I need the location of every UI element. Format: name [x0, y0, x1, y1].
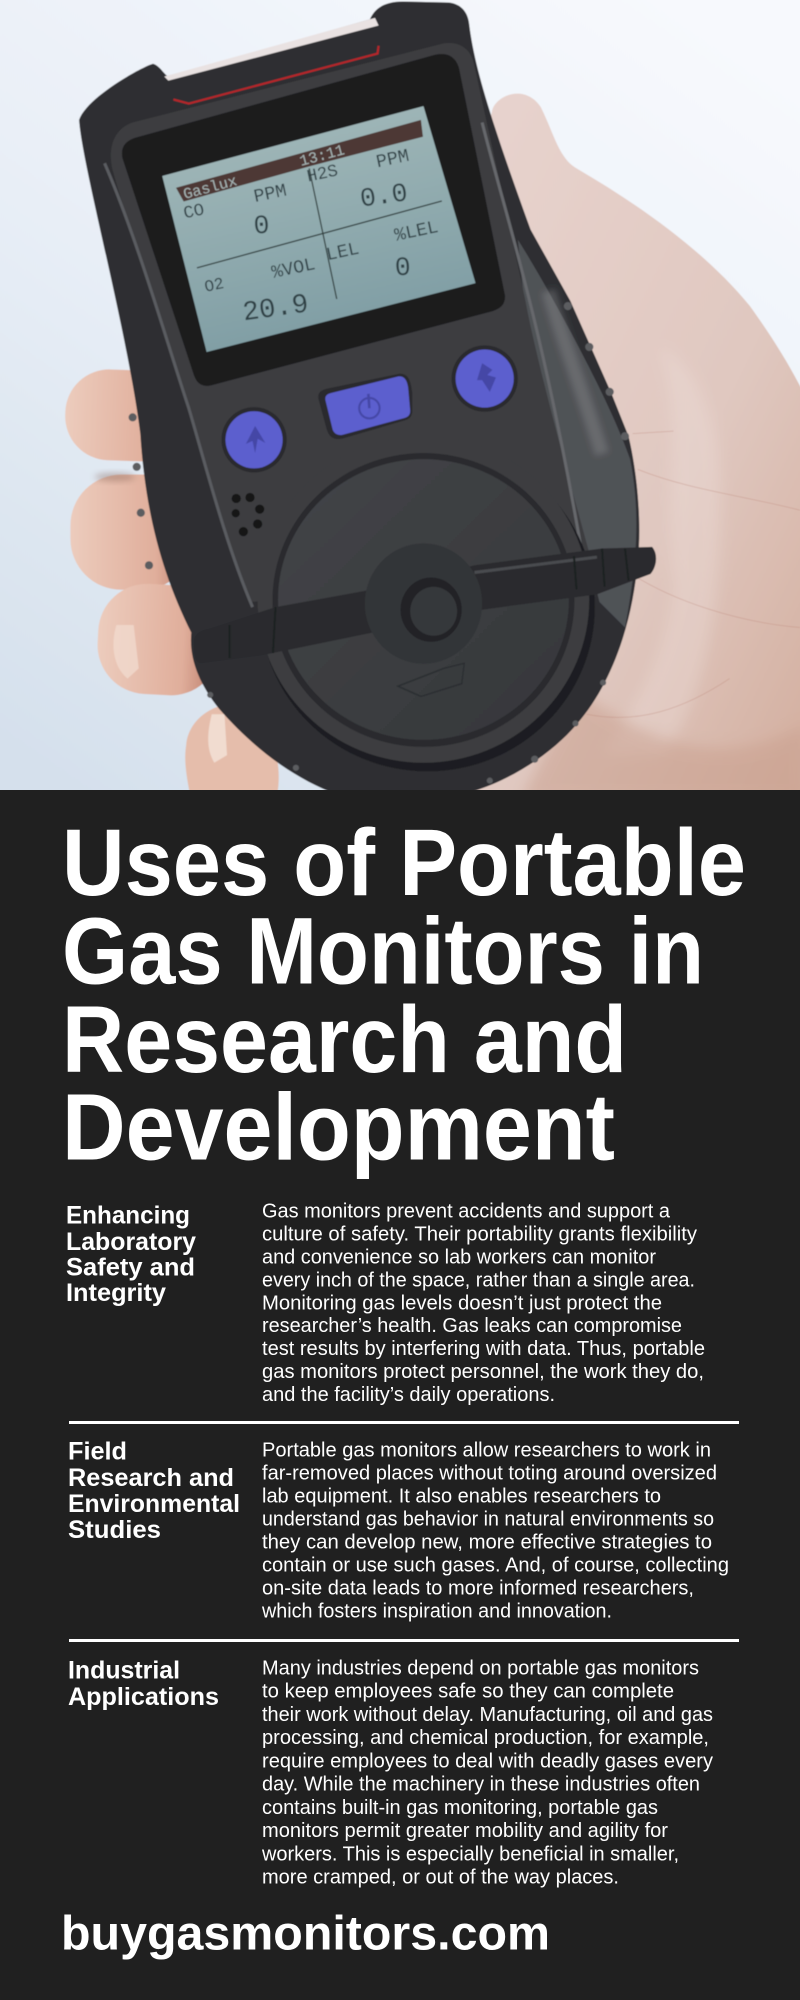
body text: laboratory safety: culture of safety. Their portability grants flexibility	[262, 1223, 697, 1245]
body text: industrial applications: more cramped, or out of the way places.	[262, 1867, 619, 1889]
body text: laboratory safety: researcher’s health. Gas leaks can compromise	[262, 1315, 682, 1337]
LCD readouts: 0	[253, 211, 271, 242]
heading: Industrial Applications: Applications	[68, 1683, 219, 1711]
photo: hand holding portable gas monitor	[0, 0, 800, 801]
body text: industrial applications: their work without delay. Manufacturing, oil and gas	[262, 1704, 713, 1726]
LCD readouts: Gaslux	[181, 172, 239, 204]
body text: field research: far-removed places without toting around oversized	[262, 1463, 717, 1485]
button: power	[318, 374, 412, 439]
LCD readouts: 0.0	[358, 178, 410, 215]
body text: laboratory safety: and convenience so lab workers can monitor	[262, 1246, 656, 1268]
body text: field research	[261, 1440, 729, 1623]
button: up arrow	[221, 407, 287, 472]
title	[62, 810, 746, 1181]
body text: industrial applications: require employees to deal with deadly gases every	[262, 1750, 713, 1772]
heading: Enhancing Laboratory Safety and Integrity	[66, 1202, 196, 1307]
body text: laboratory safety	[262, 1200, 705, 1406]
LCD readouts: 0	[394, 252, 412, 283]
body text: field research: they can develop new, more effective strategies to	[262, 1532, 712, 1554]
body text: laboratory safety: every inch of the space, rather than a single area.	[262, 1269, 695, 1291]
title: Uses of Portable	[62, 810, 746, 916]
body text: industrial applications: day. While the machinery in these industries often	[262, 1774, 700, 1796]
heading: Industrial Applications	[68, 1657, 219, 1711]
footer: website URL: buygasmonitors.com	[61, 1908, 550, 1961]
LCD readouts: 13:11	[298, 141, 347, 171]
monitor body	[79, 2, 639, 801]
title: Research and	[62, 987, 627, 1093]
LCD readouts	[181, 141, 440, 329]
body text: field research: on-site data leads to more informed researchers,	[262, 1578, 694, 1600]
LCD screen	[162, 106, 476, 352]
heading: Field Research and Environmental Studies: Environmental	[68, 1490, 240, 1518]
LCD readouts: PPM	[374, 146, 411, 173]
body text: field research: contain or use such gases. And, of course, collecting	[262, 1555, 729, 1577]
body text: industrial applications: workers. This is especially beneficial in smaller,	[261, 1843, 679, 1865]
section: Enhancing Laboratory Safety and Integrity	[66, 1200, 705, 1406]
body text: industrial applications: Many industries depend on portable gas monitors	[262, 1657, 699, 1679]
LCD readouts: O2	[203, 274, 226, 297]
section: Industrial Applications	[68, 1657, 713, 1889]
body text: industrial applications: monitors permit greater mobility and agility for	[262, 1820, 668, 1842]
hand: fingers	[64, 368, 279, 801]
heading: Enhancing Laboratory Safety and Integrity: Enhancing	[66, 1202, 190, 1230]
LCD readouts: %VOL	[270, 254, 317, 284]
heading: Field Research and Environmental Studies: Research and	[68, 1464, 234, 1492]
photo backdrop	[0, 0, 800, 801]
sensor disc	[258, 436, 595, 771]
title: Development	[62, 1075, 615, 1181]
speaker holes	[232, 493, 264, 536]
heading: Field Research and Environmental Studies	[68, 1438, 240, 1544]
heading: Field Research and Environmental Studies: Studies	[68, 1516, 161, 1544]
heading: Industrial Applications: Industrial	[68, 1657, 180, 1685]
top sensor slot and red stripe	[164, 18, 379, 104]
LCD header bar	[176, 120, 423, 202]
heading: Enhancing Laboratory Safety and Integrity: Laboratory	[66, 1228, 196, 1256]
title: Gas Monitors in	[62, 898, 704, 1004]
body text: field research: understand gas behavior in natural environments so	[262, 1509, 714, 1531]
body text: field research: which fosters inspiration and innovation.	[261, 1601, 612, 1623]
body text: laboratory safety: and the facility’s daily operations.	[262, 1384, 555, 1406]
heading: Enhancing Laboratory Safety and Integrity: Integrity	[66, 1279, 166, 1307]
body text: industrial applications: processing, and chemical production, for example,	[262, 1727, 709, 1749]
body text: field research: lab equipment. It also enables researchers to	[262, 1486, 661, 1508]
LCD readouts: PPM	[252, 180, 289, 208]
body text: industrial applications	[261, 1657, 713, 1889]
screen bezel	[122, 54, 505, 386]
hand: palm and thumb	[459, 94, 800, 801]
heading: Enhancing Laboratory Safety and Integrity: Safety and	[66, 1254, 195, 1282]
LCD grid lines	[197, 168, 442, 299]
body text: laboratory safety: Monitoring gas levels doesn’t just protect the	[262, 1292, 662, 1314]
body text: industrial applications: to keep employees safe so they can complete	[262, 1681, 674, 1703]
body text: laboratory safety: gas monitors protect personnel, the work they do,	[262, 1361, 704, 1383]
heading: Field Research and Environmental Studies: Field	[68, 1438, 127, 1466]
LCD readouts: H2S	[305, 162, 340, 188]
body text: field research: Portable gas monitors allow researchers to work in	[262, 1440, 711, 1462]
LCD readouts: 20.9	[241, 289, 311, 329]
LCD readouts: LEL	[324, 239, 361, 266]
section: Field Research and Environmental Studies	[68, 1438, 729, 1623]
body text: laboratory safety: Gas monitors prevent accidents and support a	[262, 1200, 671, 1222]
LCD readouts: CO	[182, 201, 206, 224]
body text: industrial applications: contains built-in gas monitoring, portable gas	[262, 1797, 658, 1819]
body text: laboratory safety: test results by interfering with data. Thus, portable	[262, 1338, 705, 1360]
side grip studs	[129, 302, 629, 784]
LCD readouts: %LEL	[393, 217, 440, 247]
sensor tube and knob	[194, 543, 656, 664]
button: down arrow	[452, 345, 518, 412]
